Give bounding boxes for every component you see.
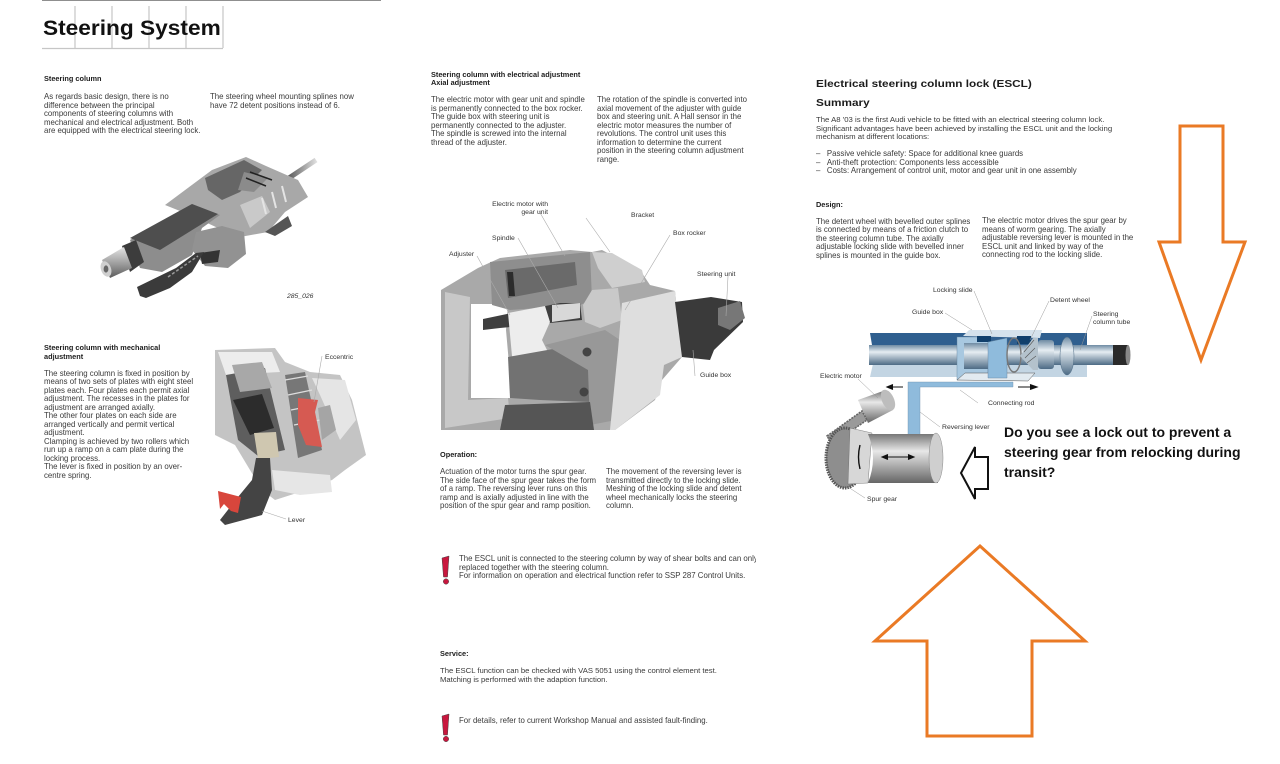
text: mechanical adjustment: adjustment. The recesses in the plates for (44, 394, 189, 403)
text: design right: adjustable reversing lever is mounted in the (982, 233, 1133, 242)
title: Steering System (43, 16, 221, 40)
text: summary: mechanism at different locations: (816, 132, 929, 141)
spur gear (826, 428, 872, 488)
heading: design: Design: (816, 200, 843, 209)
callout question: transit? (1004, 464, 1055, 480)
direction arrow right (1018, 384, 1037, 390)
label: electric motor: Electric motor with (492, 201, 548, 208)
text: design left (816, 216, 970, 260)
text: design left: The detent wheel with bevelled outer splines (816, 216, 970, 226)
callout: lever (262, 511, 306, 524)
text: spindle rotation: The rotation of the spindle is converted into (597, 95, 747, 104)
text: spindle rotation: revolutions. The control unit uses this (597, 129, 726, 138)
text: summary: The A8 '03 is the first Audi vehicle to be fitted with an electrical steering column lock. (816, 115, 1104, 124)
direction arrow left (887, 384, 903, 390)
connecting rod (908, 382, 1013, 435)
text: service: Matching is performed with the adaption function. (440, 674, 608, 684)
text: mounting splines: have 72 detent positions instead of 6. (210, 100, 340, 110)
text: operation right: The movement of the reversing lever is (606, 467, 742, 476)
text: operation right: wheel mechanically locks the steering (606, 492, 737, 502)
heading: mechanical adjustment (44, 343, 160, 360)
text: spindle rotation: range. (597, 154, 619, 164)
text: summary: Significant advantages have been achieved by installing the ESCL unit and the locking (816, 124, 1112, 132)
text: mechanical adjustment (44, 368, 193, 480)
label: steering column tube: Steering (1093, 311, 1119, 318)
icon: exclamation warning (442, 556, 450, 584)
image: electrical adjustment assembly (441, 201, 745, 430)
label: steering column tube line 2: column tube (1093, 319, 1130, 326)
text: mechanical adjustment: The other four plates on each side are (44, 411, 177, 420)
heading: electrical adjustment: Steering column with electrical adjustment (431, 70, 580, 78)
text: operation right: column. (606, 501, 633, 510)
text: design right: means of worm gearing. The axially (982, 224, 1106, 234)
text: summary (816, 115, 1112, 141)
text: mechanical adjustment: run up a ramp on a cam plate during the (44, 445, 184, 454)
locking slide (988, 338, 1007, 378)
text: electric motor: The guide box with steering unit is (431, 112, 550, 121)
text: spindle rotation: position in the steering column adjustment (597, 146, 744, 155)
text: operation right (606, 467, 742, 510)
text: basic design (44, 92, 201, 135)
text: mechanical adjustment: plates each. Four plates each permit axial (44, 386, 189, 394)
callout: eccentric (314, 354, 354, 402)
text: mechanical adjustment: means of two sets of plates with eight steel (44, 377, 193, 386)
heading: mechanical adjustment: adjustment (44, 352, 83, 360)
text: basic design: difference between the principal (44, 100, 155, 110)
list: advantages (816, 149, 1077, 175)
text: operation left: of a ramp. The reversing lever runs on this (440, 484, 587, 493)
heading: electrical adjustment: Axial adjustment (431, 78, 490, 87)
text: design right: ESCL unit and linked by way of the (982, 242, 1103, 250)
text: ESCL note: For information on operation and electrical function refer to SSP 287 Control Units. (459, 571, 745, 580)
text: operation left: Actuation of the motor turns the spur gear. (440, 467, 586, 476)
text: design right (982, 216, 1133, 259)
label: reversing lever: Reversing lever (942, 424, 990, 431)
label: box rocker: Box rocker (673, 230, 706, 237)
label: guide box: Guide box (700, 372, 732, 379)
heading: steering column: Steering column (44, 74, 102, 83)
text: ESCL note: replaced together with the steering column. (459, 562, 609, 572)
arrow: orange pointing up (871, 544, 1089, 738)
label: spur gear: Spur gear (867, 496, 898, 503)
text: mechanical adjustment: The steering column is fixed in position by (44, 368, 190, 378)
arrow: orange pointing down (1156, 124, 1248, 364)
callout question: Do you see a lock out to prevent a (1004, 424, 1231, 440)
electric motor (858, 387, 898, 423)
text: design left: is connected by means of a friction clutch to (816, 225, 968, 234)
callout question: steering gear from relocking during (1004, 444, 1240, 460)
text: basic design: components of steering columns with (44, 109, 173, 118)
image: mechanical adjustment cutaway (215, 348, 366, 525)
steering column tube (869, 333, 1130, 377)
text: basic design: As regards basic design, there is no (44, 92, 169, 101)
label: spindle: Spindle (492, 235, 515, 242)
header: title with grid tab (42, 0, 381, 50)
heading: summary: Summary (816, 98, 870, 109)
text: mechanical adjustment: adjustment. (44, 428, 85, 437)
text: operation left: The side face of the spur gear takes the form (440, 476, 596, 484)
text: electric motor: The electric motor with gear unit and spindle (431, 95, 585, 104)
text: mechanical adjustment: centre spring. (44, 470, 92, 480)
text: electric motor: The spindle is screwed into the internal (431, 129, 567, 138)
text: spindle rotation: information to determine the current (597, 138, 721, 146)
diagram: ESCL mechanism (820, 287, 1130, 503)
label: bracket: Bracket (631, 212, 654, 219)
text: basic design: are equipped with the electrical steering lock. (44, 126, 201, 135)
text: mounting splines (210, 92, 354, 110)
text: design left: splines is mounted in the guide box. (816, 250, 941, 260)
label: guide box: Guide box (912, 309, 944, 316)
text: basic design: mechanical and electrical adjustment. Both (44, 118, 193, 126)
text: ESCL note (459, 555, 756, 580)
list: advantages: – Passive vehicle safety: Space for additional knee guards (816, 149, 1023, 158)
detent wheel (1007, 337, 1074, 375)
label: electric motor: Electric motor (820, 373, 863, 380)
text: spindle rotation: box and steering unit. A Hall sensor in the (597, 112, 741, 121)
text: mechanical adjustment: The lever is fixed in position by an over- (44, 462, 182, 471)
text: mounting splines: The steering wheel mounting splines now (210, 92, 354, 101)
text: service (440, 666, 717, 684)
text: design right: connecting rod to the locking slide. (982, 250, 1102, 259)
worm gear (827, 411, 867, 444)
text: operation left: position of the spur gear and ramp position. (440, 501, 591, 510)
text: operation right: Meshing of the locking slide and detent (606, 484, 742, 493)
text: spindle rotation (597, 95, 747, 164)
label: connecting rod: Connecting rod (988, 400, 1035, 407)
heading: operation: Operation: (440, 450, 477, 459)
heading: mechanical adjustment: Steering column with mechanical (44, 343, 160, 352)
callout: eccentric: Eccentric (325, 354, 354, 361)
image: steering column assembly (100, 157, 318, 300)
text: mechanical adjustment: locking process. (44, 454, 100, 462)
text: operation right: transmitted directly to the locking slide. (606, 476, 741, 484)
list: advantages: – Costs: Arrangement of control unit, motor and gear unit in one assembly (816, 166, 1077, 175)
text: electric motor (431, 95, 585, 146)
text: service: The ESCL function can be checked with VAS 5051 using the control element test. (440, 666, 717, 675)
label: steering unit: Steering unit (697, 271, 736, 278)
callout: lever: Lever (288, 517, 306, 524)
label: gear unit: gear unit (521, 209, 548, 216)
heading: service: Service: (440, 649, 469, 658)
label: locking slide: Locking slide (933, 287, 973, 294)
text: operation left (440, 467, 596, 510)
text: mechanical adjustment: adjustment are arranged axially. (44, 402, 155, 412)
text: electric motor: is permanently connected to the box rocker. (431, 104, 583, 112)
text: mechanical adjustment: Clamping is achieved by two rollers which (44, 436, 189, 446)
text: design left: adjustable locking slide with bevelled inner (816, 242, 964, 251)
icon: exclamation warning 2 (442, 714, 450, 742)
text: electric motor: permanently connected to the adjuster. (431, 120, 566, 130)
list: advantages: – Anti-theft protection: Components less accessible (816, 158, 999, 166)
guide box (957, 330, 1042, 381)
heading: electrical adjustment (431, 70, 580, 87)
text: design left: the steering column tube. The axially (816, 234, 944, 242)
label: detent wheel: Detent wheel (1050, 297, 1090, 304)
arrow: black outline pointing left (960, 446, 989, 500)
text: spindle rotation: axial movement of the adjuster with guide (597, 104, 741, 112)
cam cylinder (858, 433, 943, 483)
text: spindle rotation: electric motor measures the number of (597, 120, 731, 130)
text: electric motor: thread of the adjuster. (431, 138, 507, 146)
heading: ESCL: Electrical steering column lock (ESCL) (816, 79, 1032, 90)
label: adjuster: Adjuster (449, 251, 475, 258)
callout question (1004, 424, 1240, 480)
text: mechanical adjustment: arranged vertically and permit vertical (44, 420, 174, 428)
text: operation left: ramp and is axially adjusted in line with the (440, 492, 589, 502)
text: details note: For details, refer to current Workshop Manual and assisted fault-finding. (459, 716, 708, 725)
text: design right: The electric motor drives the spur gear by (982, 216, 1127, 225)
figure number: 285_026 (286, 293, 314, 300)
